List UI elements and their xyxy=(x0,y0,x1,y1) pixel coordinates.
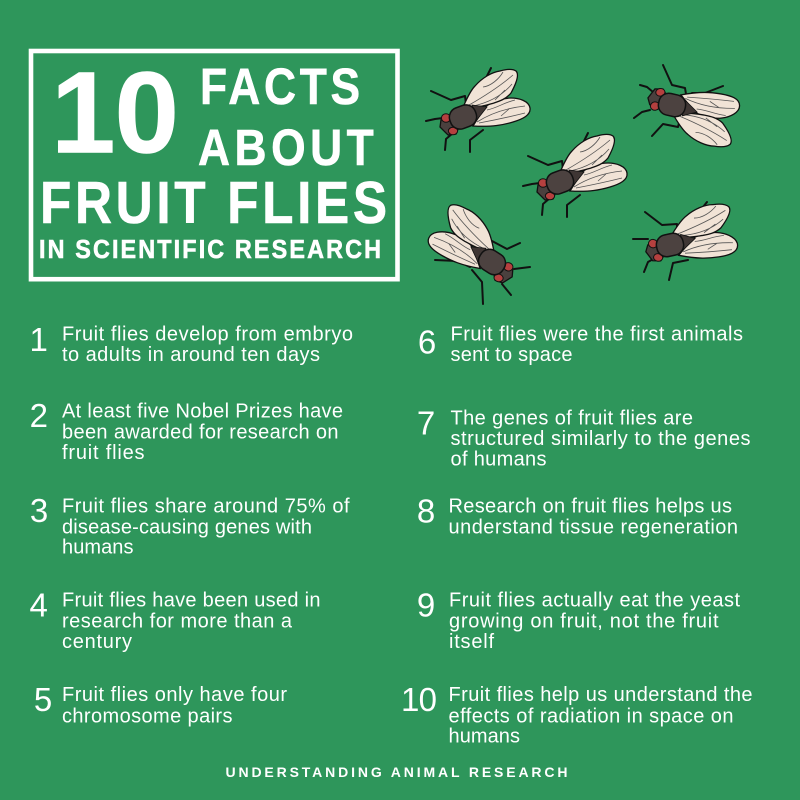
fact 10: effects of radiation in space on xyxy=(448,705,734,727)
fact 5: 5 xyxy=(34,681,52,718)
fact 3: humans xyxy=(62,537,134,559)
fact 1: 1 xyxy=(30,321,48,358)
fact 5 xyxy=(34,681,287,727)
fact 10: humans xyxy=(448,726,520,748)
fact 2: been awarded for research on xyxy=(62,422,338,444)
title block xyxy=(31,48,398,279)
fact 10: 10 xyxy=(401,681,437,718)
fact 2: fruit flies xyxy=(62,442,144,464)
fact 1: Fruit flies develop from embryo xyxy=(62,324,353,346)
fact 3 xyxy=(30,492,350,559)
fact 6: Fruit flies were the first animals xyxy=(450,324,743,346)
fact 8: Research on fruit flies helps us xyxy=(448,495,732,517)
fact 4: Fruit flies have been used in xyxy=(62,590,320,612)
fact 6 xyxy=(418,323,743,366)
fact 7: 7 xyxy=(417,404,435,441)
fact 9 xyxy=(417,587,740,653)
footer credit: UNDERSTANDING ANIMAL RESEARCH xyxy=(226,764,568,780)
fact 8 xyxy=(417,492,738,538)
fact 9: itself xyxy=(449,631,494,653)
fact 1 xyxy=(30,321,353,366)
fact 3: disease-causing genes with xyxy=(62,516,312,538)
fact 4: century xyxy=(62,631,132,653)
title frame xyxy=(31,51,398,279)
fact 2: At least five Nobel Prizes have xyxy=(62,401,343,423)
fact 7 xyxy=(417,404,750,471)
fact 3: 3 xyxy=(30,492,48,529)
fly illustration 1 xyxy=(426,68,530,152)
fact 2: 2 xyxy=(30,397,48,434)
subtitle: IN SCIENTIFIC RESEARCH xyxy=(39,236,381,264)
fact 9: growing on fruit, not the fruit xyxy=(449,611,719,633)
fact 1: to adults in around ten days xyxy=(62,344,320,366)
fact 6: sent to space xyxy=(450,344,572,366)
fact 5: chromosome pairs xyxy=(62,705,232,727)
fact 6: 6 xyxy=(418,323,436,360)
fact 10: Fruit flies help us understand the xyxy=(448,684,752,706)
fact 7: The genes of fruit flies are xyxy=(450,407,693,429)
fact 9: Fruit flies actually eat the yeast xyxy=(449,590,740,612)
title number 10: 10 xyxy=(51,48,179,178)
fact 7: of humans xyxy=(450,449,546,471)
fact 8: understand tissue regeneration xyxy=(448,516,738,538)
title word FACTS: FACTS xyxy=(200,59,360,116)
fact 4 xyxy=(30,587,320,653)
fly illustration 3 xyxy=(423,201,530,304)
fact 7: structured similarly to the genes xyxy=(450,428,750,450)
fact 4: research for more than a xyxy=(62,611,293,633)
title word ABOUT: ABOUT xyxy=(198,120,374,177)
fact 10 xyxy=(401,681,752,748)
fly illustration 2 xyxy=(523,133,627,217)
fact 2 xyxy=(30,397,343,464)
title words FRUIT FLIES: FRUIT FLIES xyxy=(40,170,387,236)
fact 5: Fruit flies only have four xyxy=(62,684,287,706)
fact 8: 8 xyxy=(417,492,435,529)
fly illustration 4 xyxy=(634,65,744,155)
fly illustration 5 xyxy=(633,195,743,280)
fact 3: Fruit flies share around 75% of xyxy=(62,495,350,517)
fact 9: 9 xyxy=(417,587,435,624)
fact 4: 4 xyxy=(30,587,48,624)
